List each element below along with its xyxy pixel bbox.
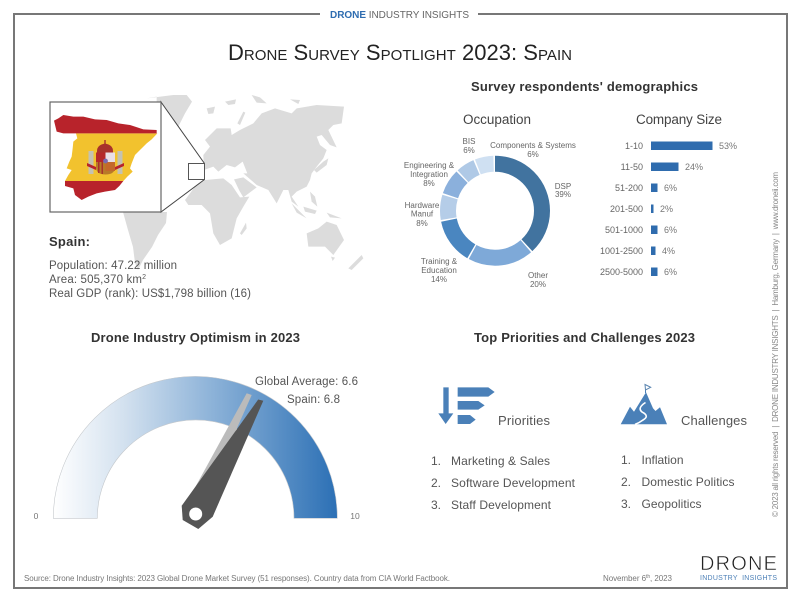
country facts: Area: 505,370 km bbox=[49, 274, 142, 286]
greenland and north america bbox=[147, 95, 192, 137]
donut labels: Hardware bbox=[405, 201, 440, 210]
zoom lines and locator box bbox=[161, 102, 204, 212]
source note: Source: Drone Industry Insights: 2023 Global Drone Market Survey (51 responses). Country data from CIA World Factbook. bbox=[24, 574, 450, 583]
company size chart bbox=[600, 112, 737, 277]
priorities list bbox=[431, 413, 576, 512]
heading: optimism: Drone Industry Optimism in 2023 bbox=[91, 330, 300, 345]
bar values: 6% bbox=[664, 267, 677, 277]
donut bbox=[448, 164, 542, 258]
bar categories: 2500-5000 bbox=[600, 267, 643, 277]
donut labels: 39% bbox=[555, 190, 571, 199]
bar values: 6% bbox=[664, 225, 677, 235]
logo: DRONE bbox=[700, 553, 777, 575]
challenges list: 3. bbox=[621, 497, 631, 511]
icon: challenges bbox=[621, 384, 667, 424]
bar categories bbox=[600, 141, 643, 277]
gauge labels: Global Average: 6.6 bbox=[255, 376, 358, 388]
bar values: 2% bbox=[660, 204, 673, 214]
occupation chart bbox=[404, 112, 576, 289]
gauge labels: 0 bbox=[34, 511, 39, 521]
gauge labels bbox=[34, 376, 360, 521]
donut labels: 6% bbox=[527, 150, 539, 159]
bar categories: 1001-2500 bbox=[600, 246, 643, 256]
priorities list: Software Development bbox=[451, 476, 576, 490]
date: November 6 bbox=[603, 574, 646, 583]
donut labels: Manuf bbox=[411, 210, 434, 218]
bar categories: 1-10 bbox=[625, 141, 643, 151]
priorities list: 1. bbox=[431, 454, 441, 468]
title: Drone Survey Spotlight 2023: Spain bbox=[228, 40, 572, 65]
bars bbox=[651, 142, 712, 276]
donut labels: BIS bbox=[463, 137, 475, 146]
challenges list: Challenges bbox=[681, 413, 748, 428]
coat of arms bbox=[87, 140, 124, 174]
priorities list: Marketing & Sales bbox=[451, 454, 550, 468]
priorities list: Priorities bbox=[498, 413, 550, 428]
south america bbox=[123, 212, 167, 270]
challenges list: Inflation bbox=[642, 453, 684, 467]
country facts: Spain: bbox=[49, 234, 90, 249]
priorities list: Staff Development bbox=[451, 498, 552, 512]
bar categories: 11-50 bbox=[621, 162, 643, 172]
header brand: DRONE INDUSTRY INSIGHTS bbox=[330, 10, 469, 21]
spain needle bbox=[182, 400, 263, 529]
company size chart: Company Size bbox=[636, 112, 722, 127]
world map bbox=[123, 95, 363, 270]
donut labels: Other bbox=[528, 271, 548, 280]
icon: priorities bbox=[438, 387, 495, 424]
priorities list: 3. bbox=[431, 498, 441, 512]
challenges list: 1. bbox=[621, 453, 631, 467]
donut labels: 8% bbox=[416, 219, 428, 228]
challenges list: Domestic Politics bbox=[642, 475, 734, 489]
donut labels: 8% bbox=[423, 179, 435, 188]
bar values: 4% bbox=[662, 246, 675, 256]
challenges list: 2. bbox=[621, 475, 631, 489]
donut labels: Engineering & bbox=[404, 161, 455, 170]
flag inset bbox=[50, 102, 161, 212]
country facts: Population: 47.22 million bbox=[49, 260, 177, 272]
country facts: Real GDP (rank): US$1,798 billion (16) bbox=[49, 288, 251, 300]
eurasia bbox=[203, 105, 344, 207]
gauge bbox=[34, 376, 360, 529]
arabia bbox=[234, 177, 257, 197]
date: th bbox=[646, 574, 650, 580]
global average needle bbox=[186, 393, 252, 504]
logo: INDUSTRY INSIGHTS bbox=[700, 575, 777, 582]
donut labels: 20% bbox=[530, 280, 546, 289]
challenges list: Geopolitics bbox=[642, 497, 702, 511]
bar categories: 501-1000 bbox=[605, 225, 643, 235]
gauge labels: 10 bbox=[350, 511, 360, 521]
bar values: 24% bbox=[685, 162, 703, 172]
bar values: 6% bbox=[664, 183, 677, 193]
bar values bbox=[660, 141, 737, 277]
country facts: 2 bbox=[142, 274, 146, 281]
donut labels: DSP bbox=[555, 182, 571, 191]
donut labels bbox=[404, 137, 576, 289]
donut labels: 6% bbox=[463, 146, 475, 155]
donut labels: Education bbox=[421, 266, 457, 275]
islands bbox=[240, 223, 247, 235]
vertical side note: © 2023 all rights reserved | DRONE INDUSTRY INSIGHTS | Hamburg, Germany | www.droneii.com bbox=[771, 172, 780, 517]
priorities list: 2. bbox=[431, 476, 441, 490]
donut labels: Components & Systems bbox=[490, 141, 576, 150]
bar categories: 51-200 bbox=[615, 183, 643, 193]
africa bbox=[185, 178, 249, 245]
date: , 2023 bbox=[650, 574, 673, 583]
bar categories: 201-500 bbox=[610, 204, 643, 214]
donut labels: Training & bbox=[421, 257, 458, 266]
occupation chart: Occupation bbox=[463, 112, 531, 127]
country facts bbox=[49, 234, 251, 300]
heading: demographics: Survey respondents' demographics bbox=[471, 79, 698, 94]
spain flag map bbox=[54, 115, 157, 200]
donut labels: 14% bbox=[431, 275, 447, 284]
gauge labels: Spain: 6.8 bbox=[287, 394, 340, 406]
challenges list bbox=[621, 413, 748, 511]
bar values: 53% bbox=[719, 141, 737, 151]
heading: priorities and challenges: Top Priorities and Challenges 2023 bbox=[474, 330, 695, 345]
donut labels: Integration bbox=[410, 170, 448, 179]
